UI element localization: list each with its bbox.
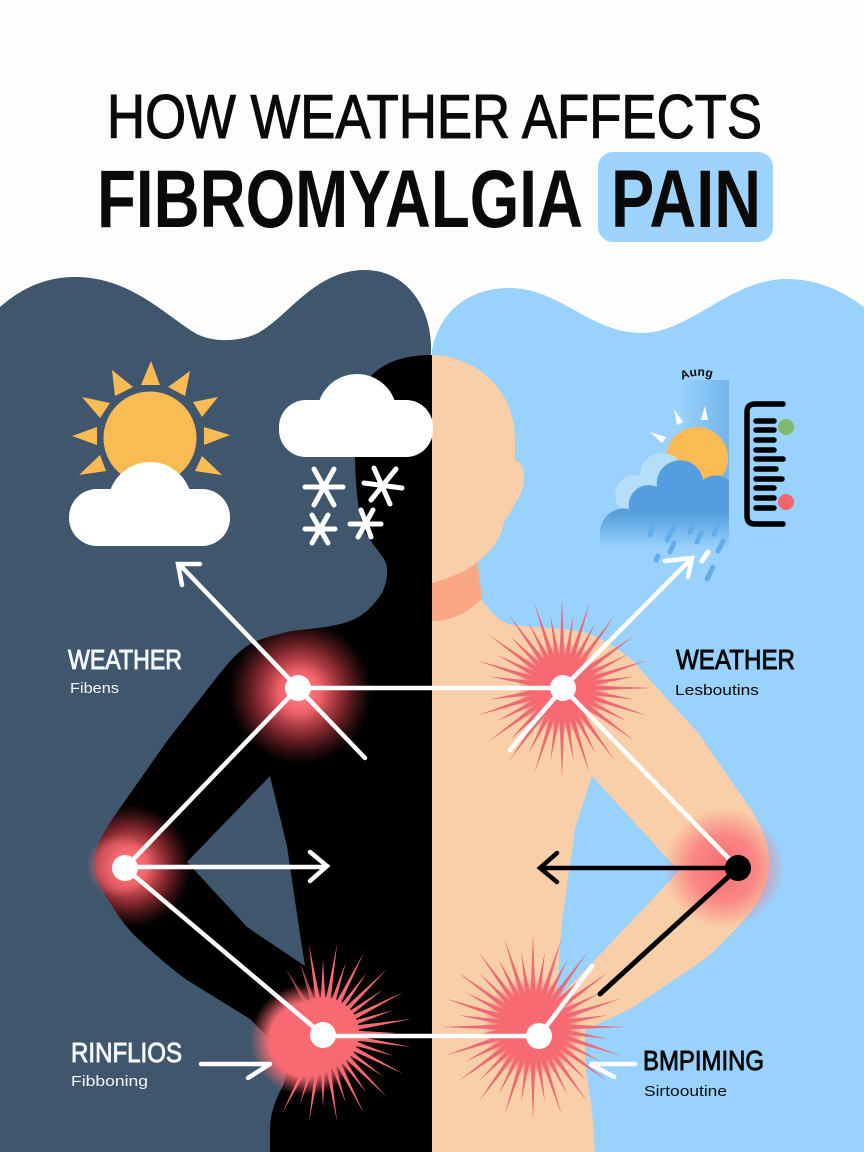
head bbox=[432, 355, 524, 583]
sun cloud bbox=[69, 462, 230, 546]
curved small caption bbox=[682, 369, 713, 380]
node: right shoulder bbox=[550, 675, 576, 701]
label: left weather: Fibens bbox=[70, 680, 119, 697]
node: right elbow bbox=[725, 855, 751, 881]
gauge bars bbox=[756, 421, 783, 508]
arrow to weather icon bbox=[178, 564, 298, 688]
neck shadow bbox=[432, 560, 482, 621]
hip label arrow bbox=[590, 1064, 635, 1077]
elbow to hip line bbox=[600, 868, 738, 994]
connector lines: center bbox=[298, 688, 563, 1036]
blue cloud bbox=[600, 460, 729, 544]
gradient strip bbox=[690, 380, 729, 480]
label: right lower: BMPIMING bbox=[643, 1045, 764, 1076]
shoulder to chest line bbox=[298, 688, 365, 758]
connector lines: right body bbox=[510, 558, 738, 1077]
label: right lower bbox=[643, 1045, 764, 1100]
snowflakes bbox=[305, 468, 402, 543]
arrow to rain icon bbox=[563, 558, 692, 688]
node: left shoulder bbox=[285, 675, 311, 701]
pain burst: right shoulder bbox=[472, 598, 652, 778]
node: right hip bbox=[526, 1023, 552, 1049]
icon: snow cloud bbox=[279, 374, 433, 543]
label: left lower: Fibboning bbox=[71, 1073, 148, 1090]
title line two: FIBROMYALGIA bbox=[97, 154, 583, 245]
white drop bbox=[702, 552, 708, 561]
label: right weather: Lesboutins bbox=[675, 682, 759, 699]
label: left lower: RINFLIOS bbox=[71, 1037, 182, 1068]
title bbox=[97, 83, 773, 245]
connector lines: left body bbox=[125, 564, 365, 1078]
label: left weather: WEATHER bbox=[68, 644, 182, 675]
body: right skin silhouette bbox=[432, 355, 769, 1152]
sun disc bbox=[104, 392, 196, 484]
shoulder link bbox=[298, 686, 563, 690]
sun rays bbox=[72, 361, 230, 475]
elbow arrow bbox=[125, 852, 327, 881]
gauge bracket bbox=[747, 404, 783, 524]
shoulder to elbow line bbox=[563, 688, 735, 865]
pain burst: right hip bbox=[440, 934, 626, 1120]
node: left hip bbox=[310, 1022, 336, 1048]
pale back cloud bbox=[615, 453, 678, 509]
joint nodes bbox=[112, 675, 751, 1049]
sun rays white bbox=[650, 406, 708, 443]
torso and arm bbox=[432, 560, 769, 1152]
green dot bbox=[778, 419, 794, 435]
sun disc bbox=[666, 427, 728, 480]
body: left black silhouette bbox=[95, 355, 432, 1152]
red dot bbox=[778, 494, 794, 510]
highlighted word: pain: PAIN bbox=[611, 154, 761, 245]
pain glow: left elbow bbox=[87, 806, 190, 926]
pain burst: left hip bbox=[250, 944, 412, 1122]
node: left elbow bbox=[112, 855, 138, 881]
shoulder to elbow line bbox=[125, 688, 298, 868]
label: left weather bbox=[68, 644, 182, 697]
rain drops bbox=[650, 522, 723, 579]
label: right lower: Sirtooutine bbox=[644, 1083, 727, 1100]
label: left lower bbox=[71, 1037, 182, 1090]
label: right weather bbox=[675, 644, 795, 699]
icon: sun behind cloud bbox=[69, 361, 230, 546]
shoulder to chest line bbox=[510, 688, 563, 750]
pain glow: left shoulder bbox=[228, 620, 372, 764]
label: right weather: WEATHER bbox=[676, 644, 795, 675]
elbow to hip line bbox=[125, 868, 323, 1035]
panel: right light background bbox=[432, 279, 864, 1152]
hip upward line bbox=[539, 966, 592, 1036]
icon: thermometer gauge bbox=[747, 404, 794, 524]
pain glow: right elbow bbox=[664, 808, 784, 928]
title line one: HOW WEATHER AFFECTS bbox=[107, 83, 762, 152]
panel: left dark background bbox=[0, 270, 432, 1152]
hip link bbox=[323, 1034, 539, 1038]
hip label arrow bbox=[201, 1064, 270, 1078]
icon: rain cloud with sun bbox=[600, 380, 740, 579]
elbow arrow bbox=[540, 853, 738, 882]
snow cloud body bbox=[279, 374, 433, 457]
curved small caption: Aung bbox=[682, 369, 713, 380]
